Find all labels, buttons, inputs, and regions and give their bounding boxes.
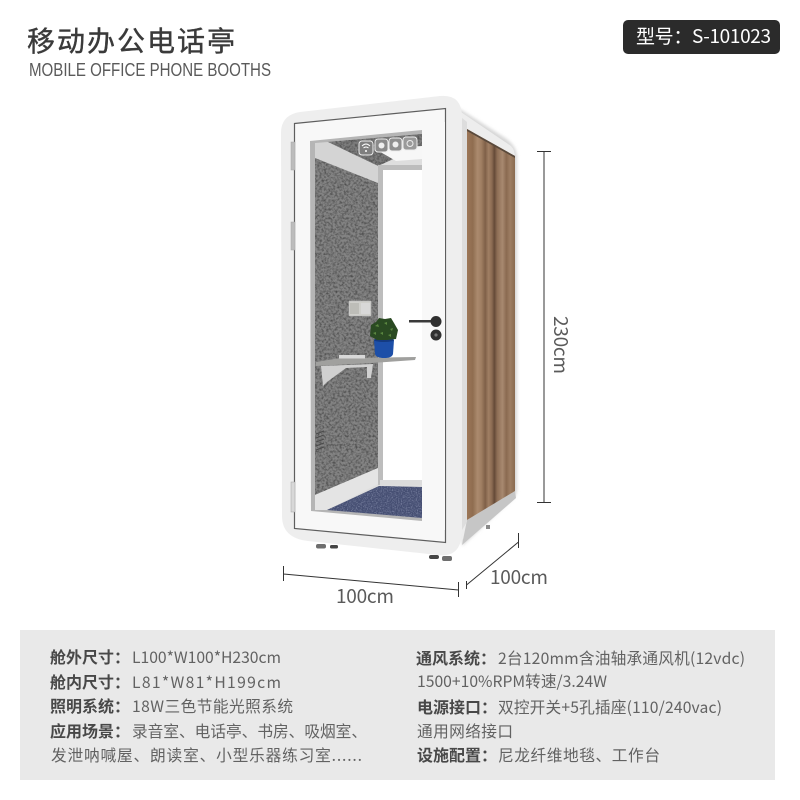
icon: acoustic felt wall [315,158,378,495]
icon: hinges [291,142,295,512]
height label: 230cm [548,316,575,374]
icon: door leaf [294,108,446,542]
icon: shelf [316,355,416,386]
right specification column: 电源接口： [417,694,497,718]
height dimension line [537,152,551,502]
subtitle: MOBILE OFFICE PHONE BOOTHS [29,60,271,80]
left specification column: 发泄呐喊屋、朗读室、小型乐器练习室...... [51,743,362,766]
icon: door glass frame right [422,122,445,530]
depth label: 100cm [490,563,548,590]
baseboard [315,468,378,510]
icon: feet [316,525,490,561]
left specification column [50,644,367,766]
icon: feature icons on glass [359,137,417,155]
icon: ceiling light [375,146,422,161]
right specification column: 通用网络接口 [417,719,513,742]
width dimension line [284,566,458,597]
right specification column: 2台120mm含油轴承通风机(12vdc) [498,646,745,669]
phone booth illustration [281,96,517,561]
icon: booth side wall [455,106,517,546]
left specification column: 18W三色节能光照系统 [132,694,293,717]
right specification column: 通风系统： [416,645,496,669]
left specification column: 录音室、电话亭、书房、吸烟室、 [132,719,367,742]
left specification column: 舱内尺寸： [50,669,130,693]
right specification column: 双控开关+5孔插座(110/240vac) [498,695,722,718]
icon: booth front frame [281,96,462,555]
left specification column: 照明系统： [50,693,130,717]
right specification column: 设施配置： [417,742,497,766]
panel: booth interior [310,130,422,521]
ceiling beam [315,142,378,183]
ceiling [327,134,422,166]
icon: door handle and lock [409,316,442,340]
icon: vent [316,431,324,450]
model number badge: 型号：S-101023 [636,22,771,49]
icon: light switch [349,301,371,316]
right specification column: 1500+10%RPM转速/3.24W [417,669,607,692]
left specification column: L81*W81*H199cm [132,670,281,693]
right specification column: 尼龙纤维地毯、工作台 [498,743,660,766]
icon: wood side panel [467,129,515,520]
left specification column: 舱外尺寸： [50,644,130,668]
right specification column [416,645,745,766]
icon: potted plant [370,318,398,358]
left specification column: L100*W100*H230cm [132,645,281,668]
left specification column: 应用场景： [50,718,130,742]
panel: specifications [20,630,775,780]
depth dimension line [466,533,518,589]
title: 移动办公电话亭 [27,20,237,60]
icon: carpet [327,486,422,518]
model number badge [623,20,780,54]
back window [378,165,422,485]
width label: 100cm [336,582,394,609]
